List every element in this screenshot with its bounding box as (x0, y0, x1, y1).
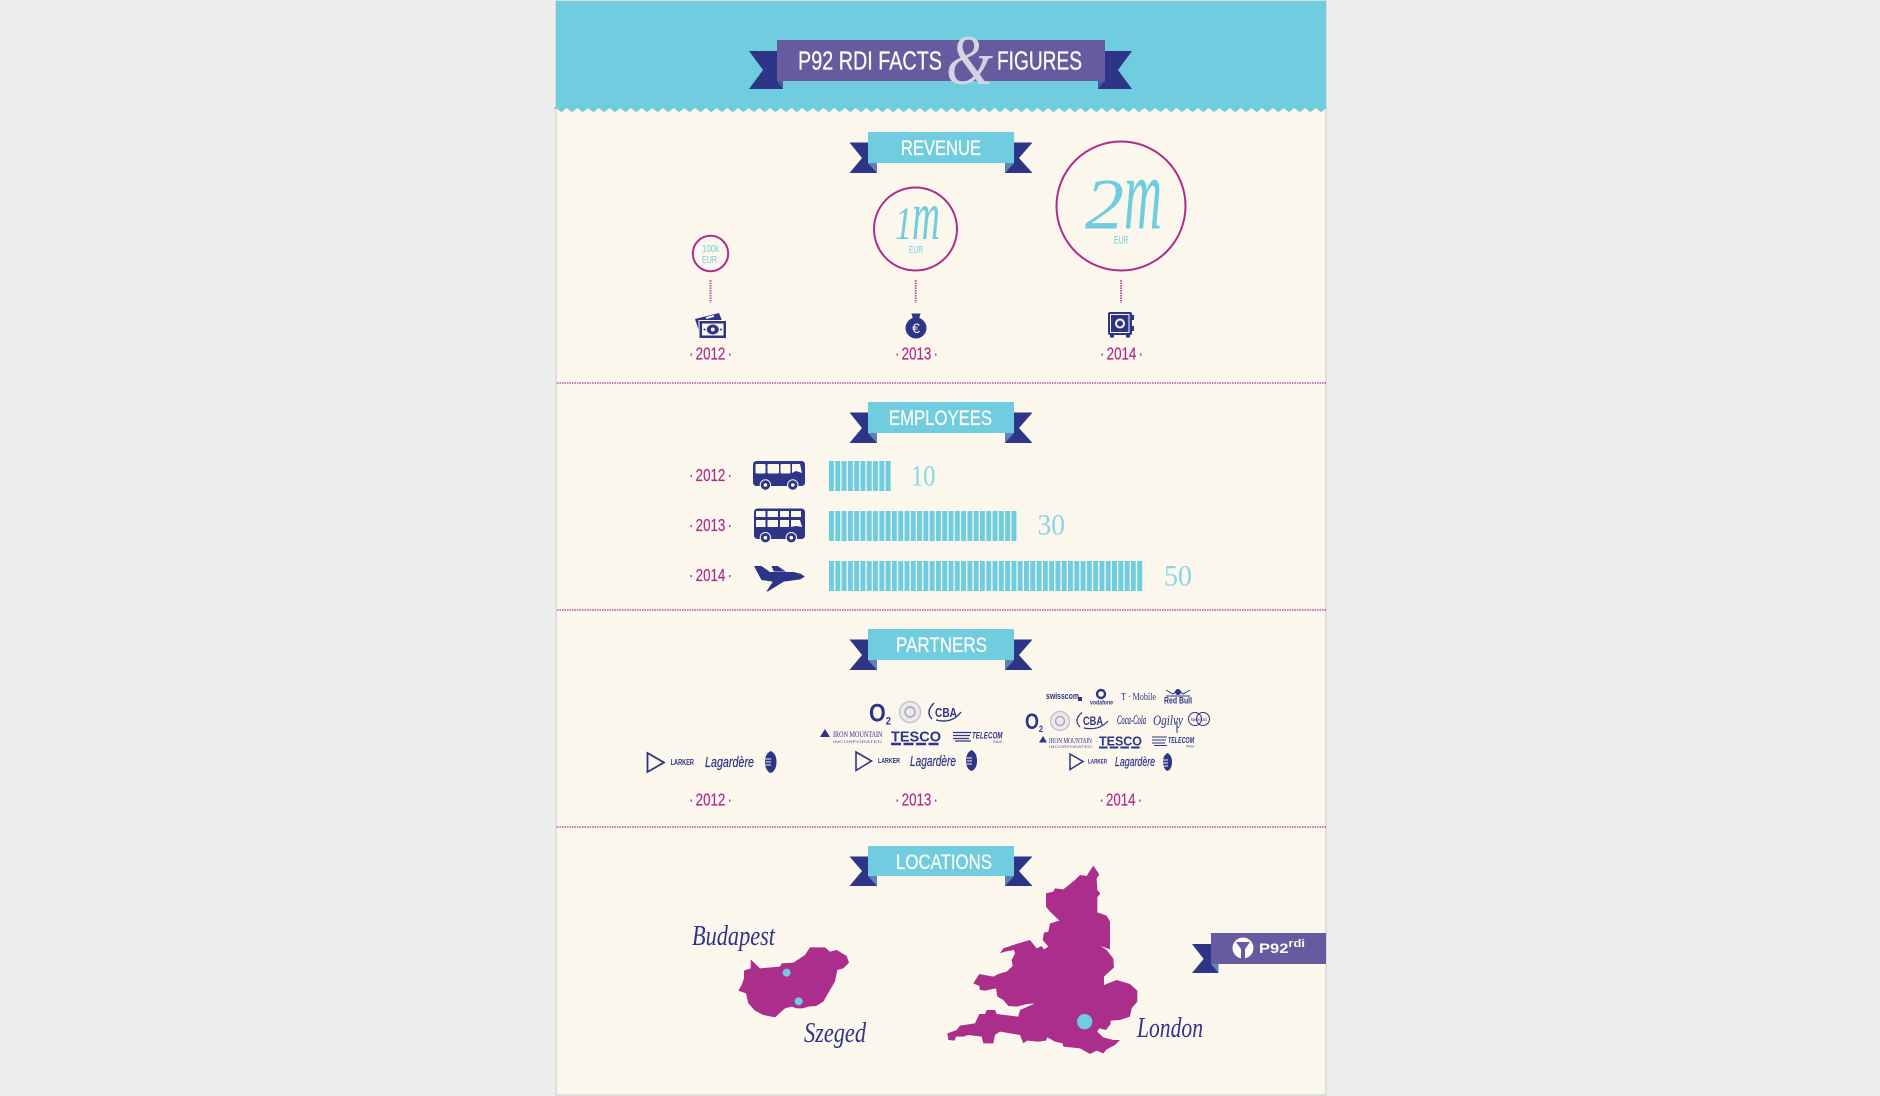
bar: 30 employees (829, 511, 1018, 541)
P92 rdi logo flag (1192, 933, 1326, 973)
employees row 2012 (689, 460, 936, 492)
logo mark (1232, 938, 1254, 959)
value: 10: 10 (911, 460, 936, 492)
logo wordmark: rdi (1288, 938, 1305, 950)
partners 2014 logos (1025, 689, 1210, 810)
partners 2012 logos: Lagardère (705, 754, 754, 771)
revenue year labels: · 2012 · (689, 344, 732, 364)
label: Budapest: Budapest (692, 921, 776, 952)
revenue 2014: bubble: EUR (1114, 234, 1129, 246)
partners 2013 logos: TESCO (891, 728, 941, 746)
partners 2014 logos: CBA (1083, 714, 1103, 728)
employees row 2013: · 2013 · (689, 515, 732, 535)
title ampersand: & (946, 22, 993, 100)
section banner: revenue: REVENUE (901, 137, 981, 160)
label: London: London (1136, 1013, 1203, 1044)
section banner: revenue (850, 132, 1032, 173)
partners 2012 logos: LARKER (671, 758, 694, 767)
employees row 2014 (689, 560, 1192, 592)
revenue 2012: bubble: 100k (702, 243, 720, 255)
revenue year labels: · 2013 · (895, 344, 938, 364)
partners 2013 logos: ITALIA (993, 740, 1003, 744)
partners 2014 logos: LARKER (1088, 758, 1107, 766)
partners 2013 logos (820, 700, 1003, 810)
partners 2013 logos: INCORPORATED (833, 740, 882, 744)
value: 30: 30 (1038, 508, 1065, 542)
title ribbon (749, 22, 1132, 100)
poster panel (556, 1, 1326, 1095)
employees row 2014: · 2014 · (689, 565, 732, 585)
partners 2012 logos: · 2012 · (689, 790, 732, 810)
partners 2014 logos: Lagardère (1115, 754, 1155, 769)
partners 2013 logos: Lagardère (910, 753, 956, 770)
section banner: partners (850, 629, 1032, 670)
partners 2014 logos: TESCO (1099, 734, 1142, 748)
bar: 50 employees (829, 561, 1144, 591)
revenue 2013: bubble: m (912, 178, 940, 255)
section banner: locations: LOCATIONS (896, 851, 992, 874)
revenue 2012: bubble: EUR (702, 254, 717, 266)
employees row 2013 (689, 508, 1065, 543)
employees row 2012: · 2012 · (689, 465, 732, 485)
partners 2014 logos: 2 (1039, 724, 1043, 734)
partners 2014 logos: IRON MOUNTAIN (1049, 736, 1092, 745)
partners 2014 logos: O (1025, 709, 1042, 734)
partners 2014 logos: Coca-Cola (1117, 712, 1146, 727)
revenue 2013: bubble (874, 178, 957, 270)
section banner: employees (850, 402, 1032, 443)
icon: airplane (754, 566, 805, 591)
bar: 10 employees (829, 461, 891, 491)
value: 50: 50 (1164, 560, 1192, 592)
partners 2014 logos: Red Bull (1164, 696, 1192, 706)
revenue 2014: bubble: 2 (1085, 164, 1124, 244)
logo wordmark: P92 (1259, 940, 1284, 956)
partners 2012 logos (648, 751, 776, 810)
map: Hungary (738, 947, 849, 1017)
partners 2014 logos: · 2014 · (1100, 790, 1142, 810)
partners 2013 logos: TELECOM (972, 730, 1003, 740)
partners 2014 logos: T · Mobile (1121, 692, 1156, 703)
revenue 2013: bubble: 1 (895, 198, 912, 250)
partners 2013 logos: LARKER (878, 756, 900, 765)
section banner: partners: PARTNERS (896, 634, 987, 657)
header band (554, 1, 1327, 113)
icon: double decker bus (754, 508, 805, 543)
partners 2014 logos: Ogilvy (1153, 713, 1183, 729)
label: Szeged: Szeged (804, 1018, 867, 1049)
revenue 2012: bubble (693, 236, 728, 271)
revenue connectors (710, 280, 1121, 303)
partners 2013 logos: · 2013 · (895, 790, 938, 810)
partners 2013 logos: CBA (935, 705, 957, 720)
icon: money bag: € (912, 320, 920, 336)
partners 2013 logos: O (869, 700, 888, 728)
revenue 2014: bubble: m (1124, 136, 1162, 252)
section banner: employees: EMPLOYEES (889, 407, 992, 430)
icon: money bag (906, 314, 926, 338)
partners 2013 logos: 2 (886, 716, 891, 728)
partners 2014 logos: MasterCard (1191, 717, 1207, 722)
section banner: locations (850, 846, 1032, 886)
partners 2013 logos: IRON MOUNTAIN (833, 729, 882, 739)
revenue year labels: · 2014 · (1100, 344, 1143, 364)
partners 2014 logos: INCORPORATED (1049, 745, 1093, 749)
partners 2014 logos: ITALIA (1186, 744, 1195, 748)
revenue 2013: bubble: EUR (909, 245, 923, 256)
partners 2014 logos: swisscom (1046, 691, 1079, 701)
icon: bus (753, 461, 805, 491)
map: England and Wales (947, 866, 1137, 1054)
title text left: P92 RDI FACTS (798, 46, 942, 76)
revenue year labels (689, 344, 1143, 364)
icon: banknotes (695, 313, 726, 338)
title text right: FIGURES (997, 46, 1082, 76)
revenue 2014: bubble (1056, 136, 1186, 270)
icon: safe (1108, 312, 1134, 338)
partners 2014 logos: TELECOM (1168, 736, 1194, 745)
partners 2014 logos: vodafone (1090, 700, 1113, 706)
